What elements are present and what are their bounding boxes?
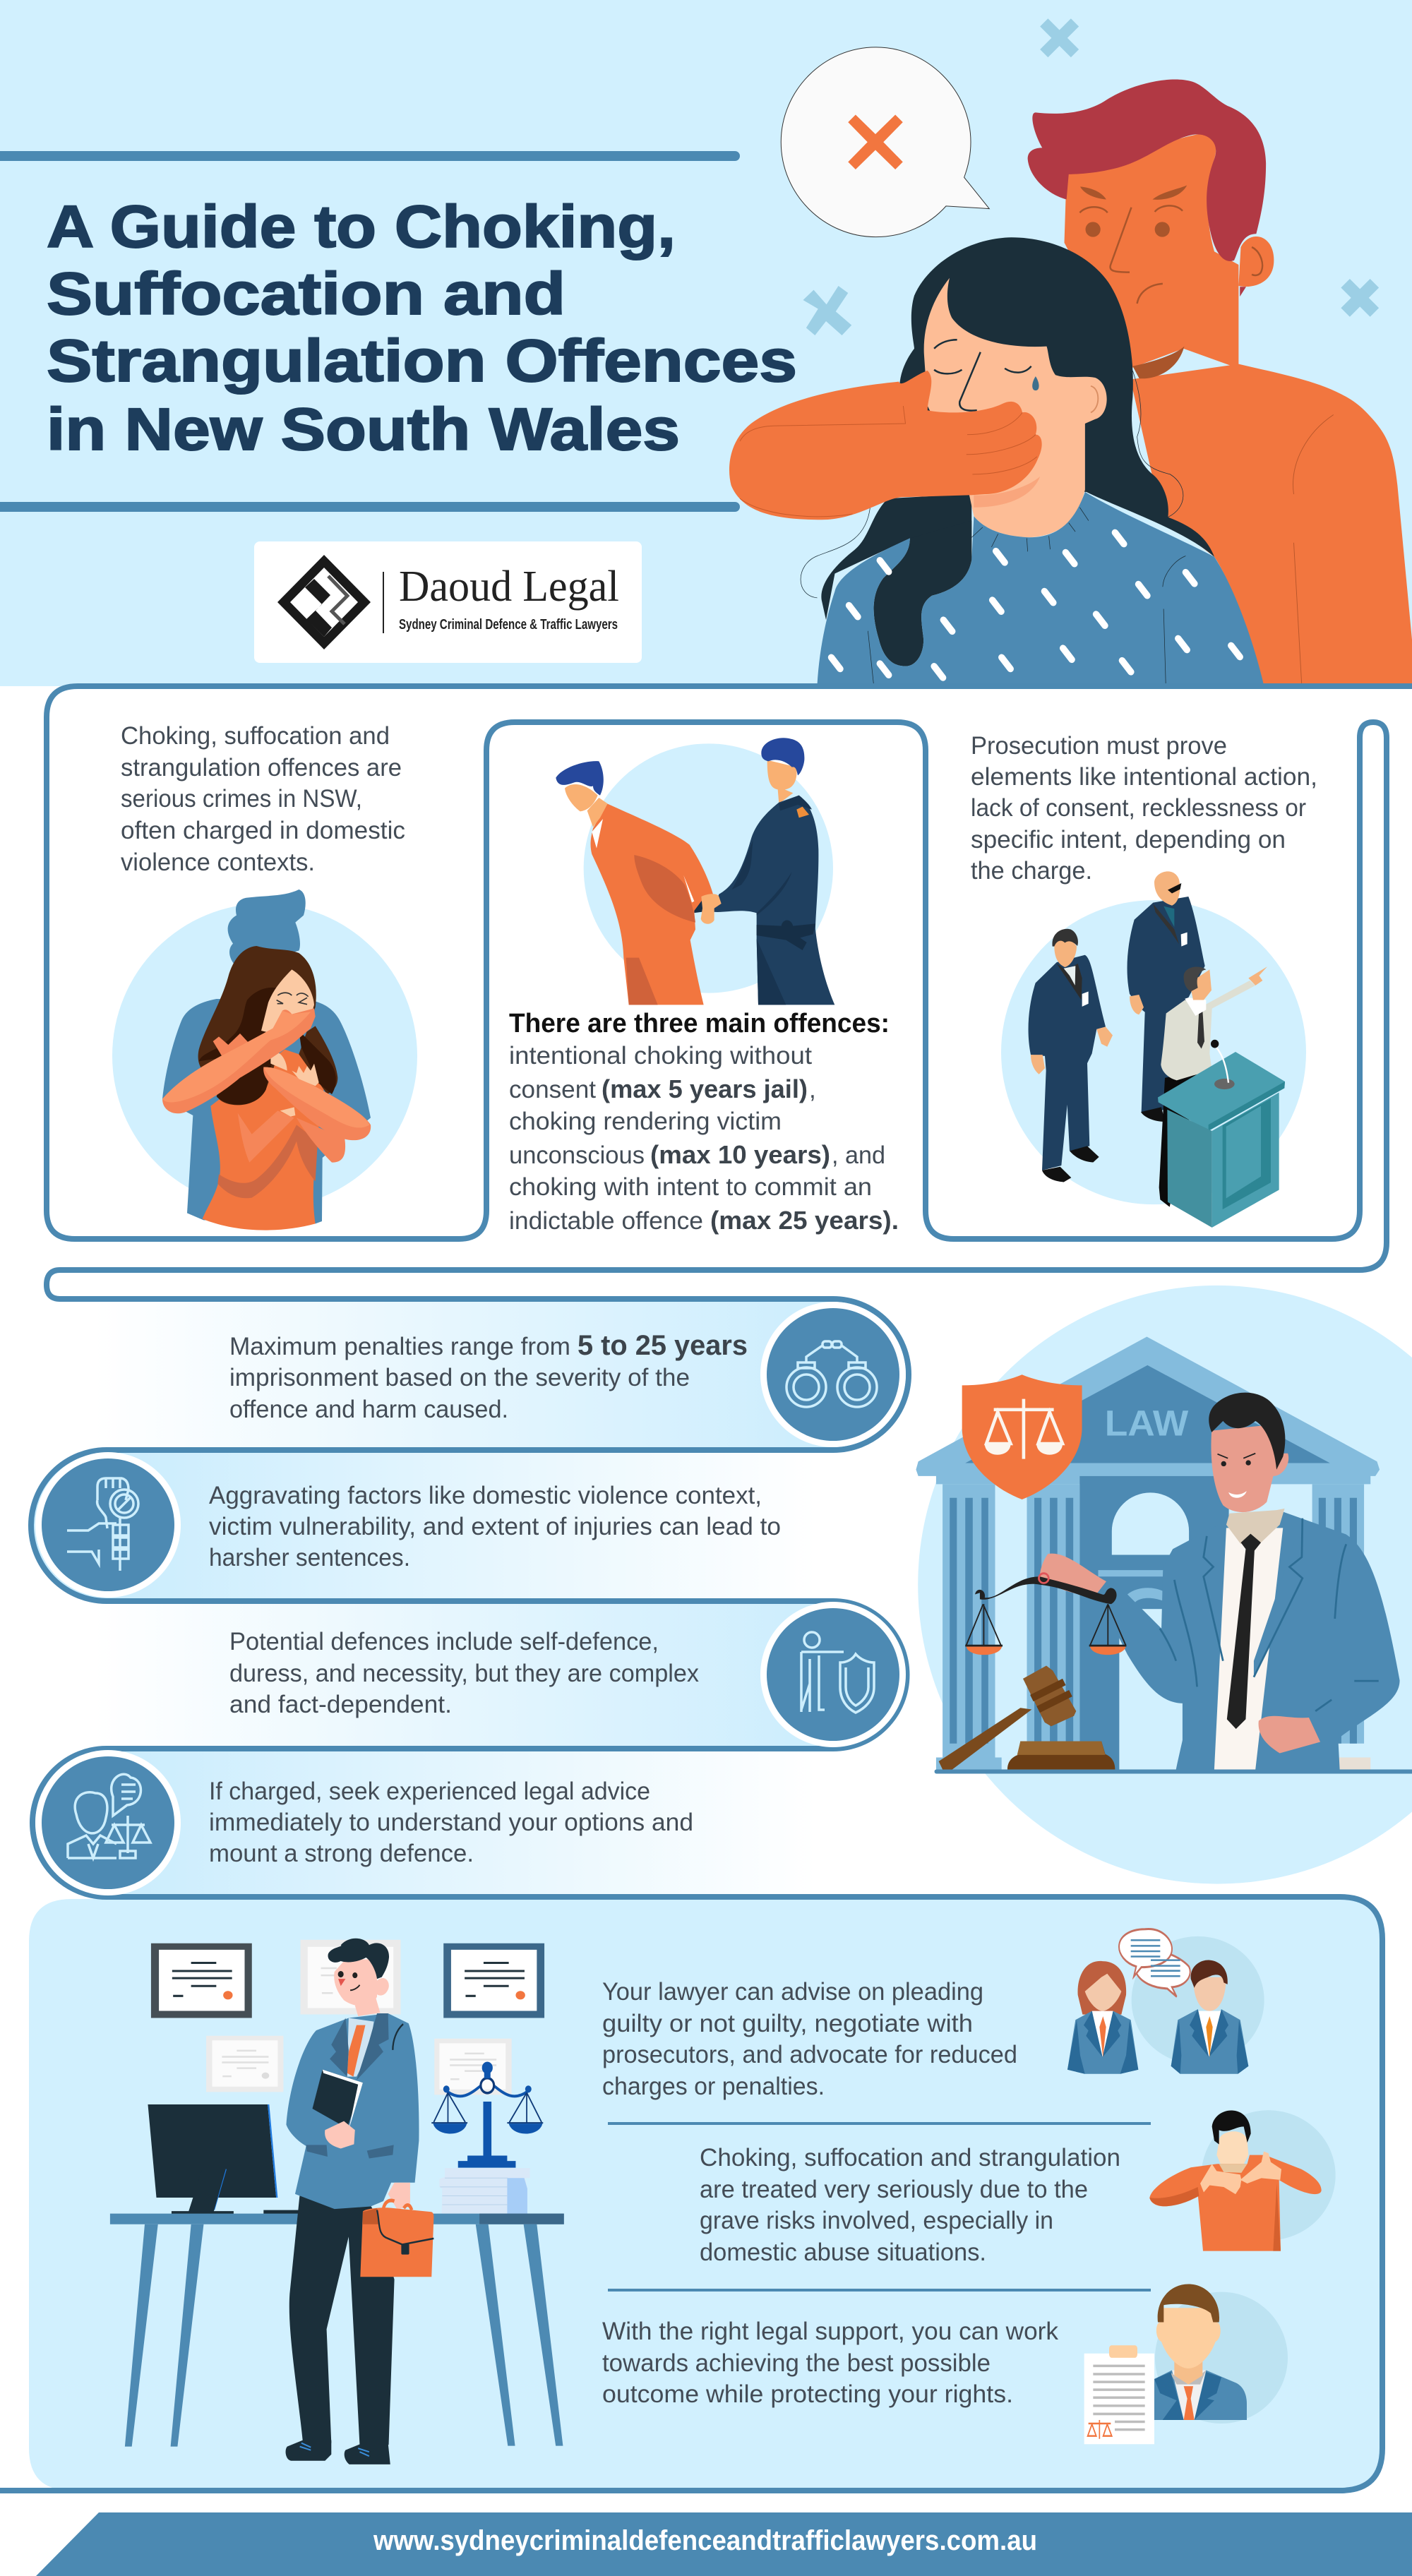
monitor: [148, 2104, 300, 2214]
text: three main offences: consent: [509, 1076, 596, 1103]
shield: [962, 1374, 1082, 1499]
arm and hand: [729, 371, 1042, 520]
divider 2: [608, 2289, 1151, 2292]
text: right legal support: [602, 2318, 1058, 2408]
text: potential defences: [229, 1628, 699, 1718]
illustration: woman covering face: [112, 889, 417, 1230]
text: prosecution: lack of consent, recklessness or: [971, 794, 1306, 822]
text: maximum penalties: 5 to 25 years: [578, 1330, 748, 1361]
text: aggravating factors: harsher sentences.: [209, 1544, 410, 1571]
lawyer: [1040, 1393, 1400, 1770]
left hand: [213, 1034, 249, 1059]
text: right legal support: outcome while protecting your rights.: [602, 2380, 1013, 2408]
icon: lawyer with scales: [35, 1750, 181, 1895]
desk: [110, 2214, 564, 2447]
woman: hair: [821, 237, 1214, 620]
woman: face: [924, 278, 1107, 537]
gavel: [939, 1666, 1115, 1770]
text: intro: strangulation offences are: [121, 754, 402, 781]
left guard: [1029, 955, 1106, 1170]
hand scales: [965, 1574, 1126, 1655]
rear guard: [1127, 897, 1205, 1112]
briefcase: [360, 2200, 433, 2277]
text: three main offences: ,: [809, 1076, 816, 1103]
text: legal advice: mount a strong defence.: [209, 1840, 474, 1867]
text: right legal support: With the right legal support, you can work: [602, 2318, 1058, 2345]
cop arm back: [693, 900, 702, 913]
ground line: [935, 1770, 1412, 1773]
text: potential defences: Potential defences include self-defence,: [229, 1628, 659, 1655]
title rule bottom: [0, 502, 740, 512]
illustration: lawyer at desk: [110, 1939, 564, 2464]
thin lines: hair and clothes: [801, 371, 1185, 685]
text: lawyer advice: guilty or not guilty, negotiate with: [602, 2010, 973, 2037]
text: prosecution: elements like intentional action,: [971, 763, 1317, 791]
text: three main offences: There are three main offences:: [509, 1009, 890, 1038]
logo: Daoud Legal: Daoud Legal: [399, 563, 619, 611]
text: three main offences: choking with intent to commit an: [509, 1173, 872, 1201]
band: row 2: [31, 1450, 904, 1601]
text: potential defences: duress, and necessity, but they are complex: [229, 1660, 699, 1687]
speech bubbles: [1137, 1951, 1190, 1996]
title: [47, 193, 797, 462]
text: legal advice: [209, 1778, 693, 1867]
LAW sign: LAW: [1105, 1403, 1189, 1444]
text: three main offences: unconscious: [509, 1142, 645, 1169]
text: prosecution: [971, 732, 1317, 885]
icon: person with shield: [760, 1602, 906, 1747]
text: potential defences: and fact-dependent.: [229, 1691, 452, 1718]
woman: blouse: [818, 492, 1264, 685]
icon: man holding his throat: [1149, 2110, 1336, 2251]
panel: legal help background: [29, 1899, 1382, 2491]
text: three main offences: [509, 1009, 899, 1235]
text: aggravating factors: [209, 1482, 781, 1571]
right forearm and arm: [297, 1118, 345, 1163]
title: A Guide to Choking,: [47, 193, 676, 260]
text: lawyer advice: [602, 1978, 1017, 2100]
speaker: [1159, 1071, 1200, 1207]
icon: man with document: [1084, 2284, 1288, 2444]
text: prosecution: specific intent, depending on: [971, 826, 1286, 853]
text: treated seriously: domestic abuse situations.: [700, 2239, 986, 2266]
text: three main offences: , and: [832, 1142, 885, 1169]
thin lines: man's shoulder: [1293, 415, 1334, 685]
text: right legal support: towards achieving the best possible: [602, 2349, 991, 2377]
man: body: [1130, 364, 1412, 685]
logo: Daoud Legal: Sydney Criminal Defence & Traffic Lawyers: [399, 617, 618, 633]
left arm reaching face: [162, 1008, 316, 1113]
text: maximum penalties: offence and harm caused.: [229, 1396, 508, 1423]
text: lawyer advice: Your lawyer can advise on pleading: [602, 1978, 983, 2006]
text: maximum penalties: [229, 1330, 748, 1423]
text: intro: Choking, suffocation and: [121, 722, 390, 750]
footer band with URL: [36, 2512, 1412, 2576]
text: lawyer advice: prosecutors, and advocate for reduced: [602, 2041, 1017, 2068]
text: aggravating factors: Aggravating factors like domestic violence context,: [209, 1482, 762, 1509]
illustration: officer and prisoner: [556, 738, 834, 1005]
title: Strangulation Offences: [47, 328, 797, 394]
panel: continuous serpentine frame: [0, 686, 1412, 2491]
text: intro: serious crimes in NSW,: [121, 785, 362, 813]
decorative crosses: [803, 18, 1379, 335]
text: treated seriously: grave risks involved, especially in: [700, 2207, 1053, 2234]
man: head: [1028, 80, 1274, 378]
text: maximum penalties: imprisonment based on the severity of the: [229, 1364, 690, 1391]
text: legal advice: If charged, seek experienced legal advice: [209, 1778, 650, 1805]
band: row 3: [60, 1601, 907, 1749]
certificates: [151, 1940, 544, 2095]
text: three main offences: indictable offence: [509, 1207, 703, 1235]
text: treated seriously: Choking, suffocation and strangulation: [700, 2144, 1120, 2171]
text: aggravating factors: victim vulnerability, and extent of injuries can lead to: [209, 1513, 781, 1540]
text: three main offences: (max 10 years): [650, 1140, 830, 1169]
lectern: [1158, 1052, 1285, 1131]
logo: Daoud Legal: [254, 541, 642, 663]
illustration: prosecution in court: [1001, 871, 1306, 1228]
panel: hero background: [0, 0, 1412, 686]
papers and desk scale: [431, 2062, 543, 2214]
title: in New South Wales: [47, 396, 680, 462]
text: lawyer advice: charges or penalties.: [602, 2073, 825, 2100]
divider 1: [608, 2122, 1151, 2125]
text: treated seriously: are treated very seriously due to the: [700, 2176, 1088, 2203]
text: legal advice: immediately to understand your options and: [209, 1809, 693, 1836]
blouse dots: [832, 532, 1240, 678]
text: prosecution: Prosecution must prove: [971, 732, 1227, 760]
text: three main offences: (max 25 years).: [710, 1206, 899, 1235]
hero illustration: [729, 18, 1412, 685]
text: three main offences: (max 5 years jail): [602, 1074, 808, 1103]
text: intro: often charged in domestic: [121, 817, 405, 844]
icons: people illustrations: [1067, 1929, 1336, 2444]
icon: hand with prohibition: [35, 1452, 181, 1598]
icon: two lawyers talking: [1067, 1929, 1264, 2074]
courthouse: [916, 1336, 1380, 1770]
lawyer: [286, 1939, 419, 2464]
title: Suffocation and: [47, 260, 566, 327]
text: treated seriously: [700, 2144, 1120, 2266]
speech bubble with cross: [781, 47, 989, 237]
title rule top: [0, 151, 740, 161]
text: intro: [121, 722, 405, 876]
icon: handcuffs: [760, 1302, 906, 1447]
text: three main offences: intentional choking without: [509, 1042, 812, 1070]
band: row 4: [32, 1749, 904, 1897]
band: row 1: [60, 1299, 909, 1450]
text: maximum penalties: Maximum penalties range from: [229, 1333, 570, 1360]
illustration: lawyer at courthouse: [916, 1286, 1412, 1884]
text: intro: violence contexts.: [121, 849, 315, 876]
footer band with URL: www.sydneycriminaldefenceandtrafficlawyers.com.au: [373, 2525, 1037, 2556]
text: prosecution: the charge.: [971, 857, 1092, 885]
text: three main offences: choking rendering victim: [509, 1108, 782, 1135]
